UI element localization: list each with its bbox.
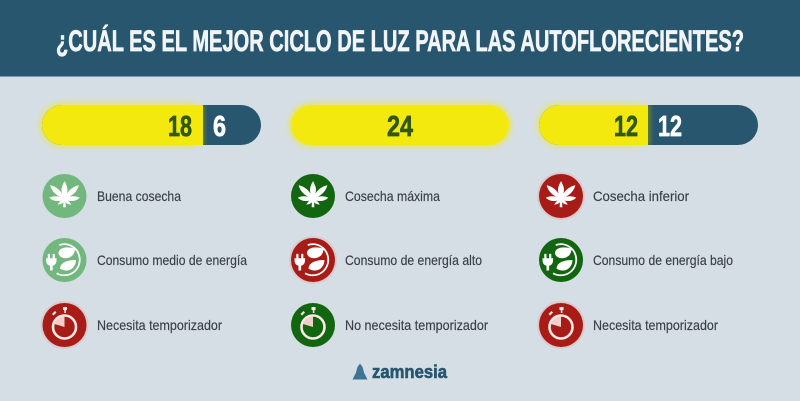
item: cosecha inferior: Cosecha inferior	[593, 188, 689, 204]
icon: bell	[352, 364, 368, 380]
item: buena cosecha	[42, 174, 181, 218]
light bar 12/12: 12	[614, 111, 638, 143]
light bar 18/6	[40, 103, 261, 147]
wordmark: zamnesia	[372, 362, 448, 382]
item: necesita temporizador	[40, 301, 222, 349]
item: consumo medio: Consumo medio de energía	[97, 252, 247, 268]
light bar 18/6: 6	[213, 111, 226, 143]
logo: zamnesia	[352, 362, 448, 382]
column 3: 12/12	[537, 103, 758, 349]
item: consumo alto	[289, 236, 482, 284]
item: no necesita temporizador: No necesita temporizador	[345, 317, 488, 333]
item: consumo medio	[42, 238, 247, 282]
light bar 18/6: 18	[168, 111, 192, 143]
light bar 24	[289, 103, 511, 147]
light bar 12/12: 12	[658, 111, 682, 143]
item: consumo bajo	[539, 238, 733, 282]
item: no necesita temporizador	[291, 303, 488, 347]
light bar 12/12	[537, 103, 758, 147]
item: consumo bajo: Consumo de energía bajo	[593, 252, 733, 268]
title banner	[0, 0, 800, 77]
item: consumo alto: Consumo de energía alto	[345, 252, 482, 268]
item: necesita temporizador	[537, 301, 718, 349]
item: necesita temporizador: Necesita temporizador	[593, 317, 718, 333]
light bar 24: 24	[387, 111, 413, 143]
item: cosecha máxima: Cosecha máxima	[345, 188, 440, 204]
item: buena cosecha: Buena cosecha	[97, 188, 181, 204]
item: cosecha máxima	[291, 174, 440, 218]
column 1: 18/6	[40, 103, 261, 349]
item: necesita temporizador: Necesita temporizador	[97, 317, 222, 333]
column 2: 24	[289, 103, 511, 347]
item: cosecha inferior	[537, 172, 689, 220]
